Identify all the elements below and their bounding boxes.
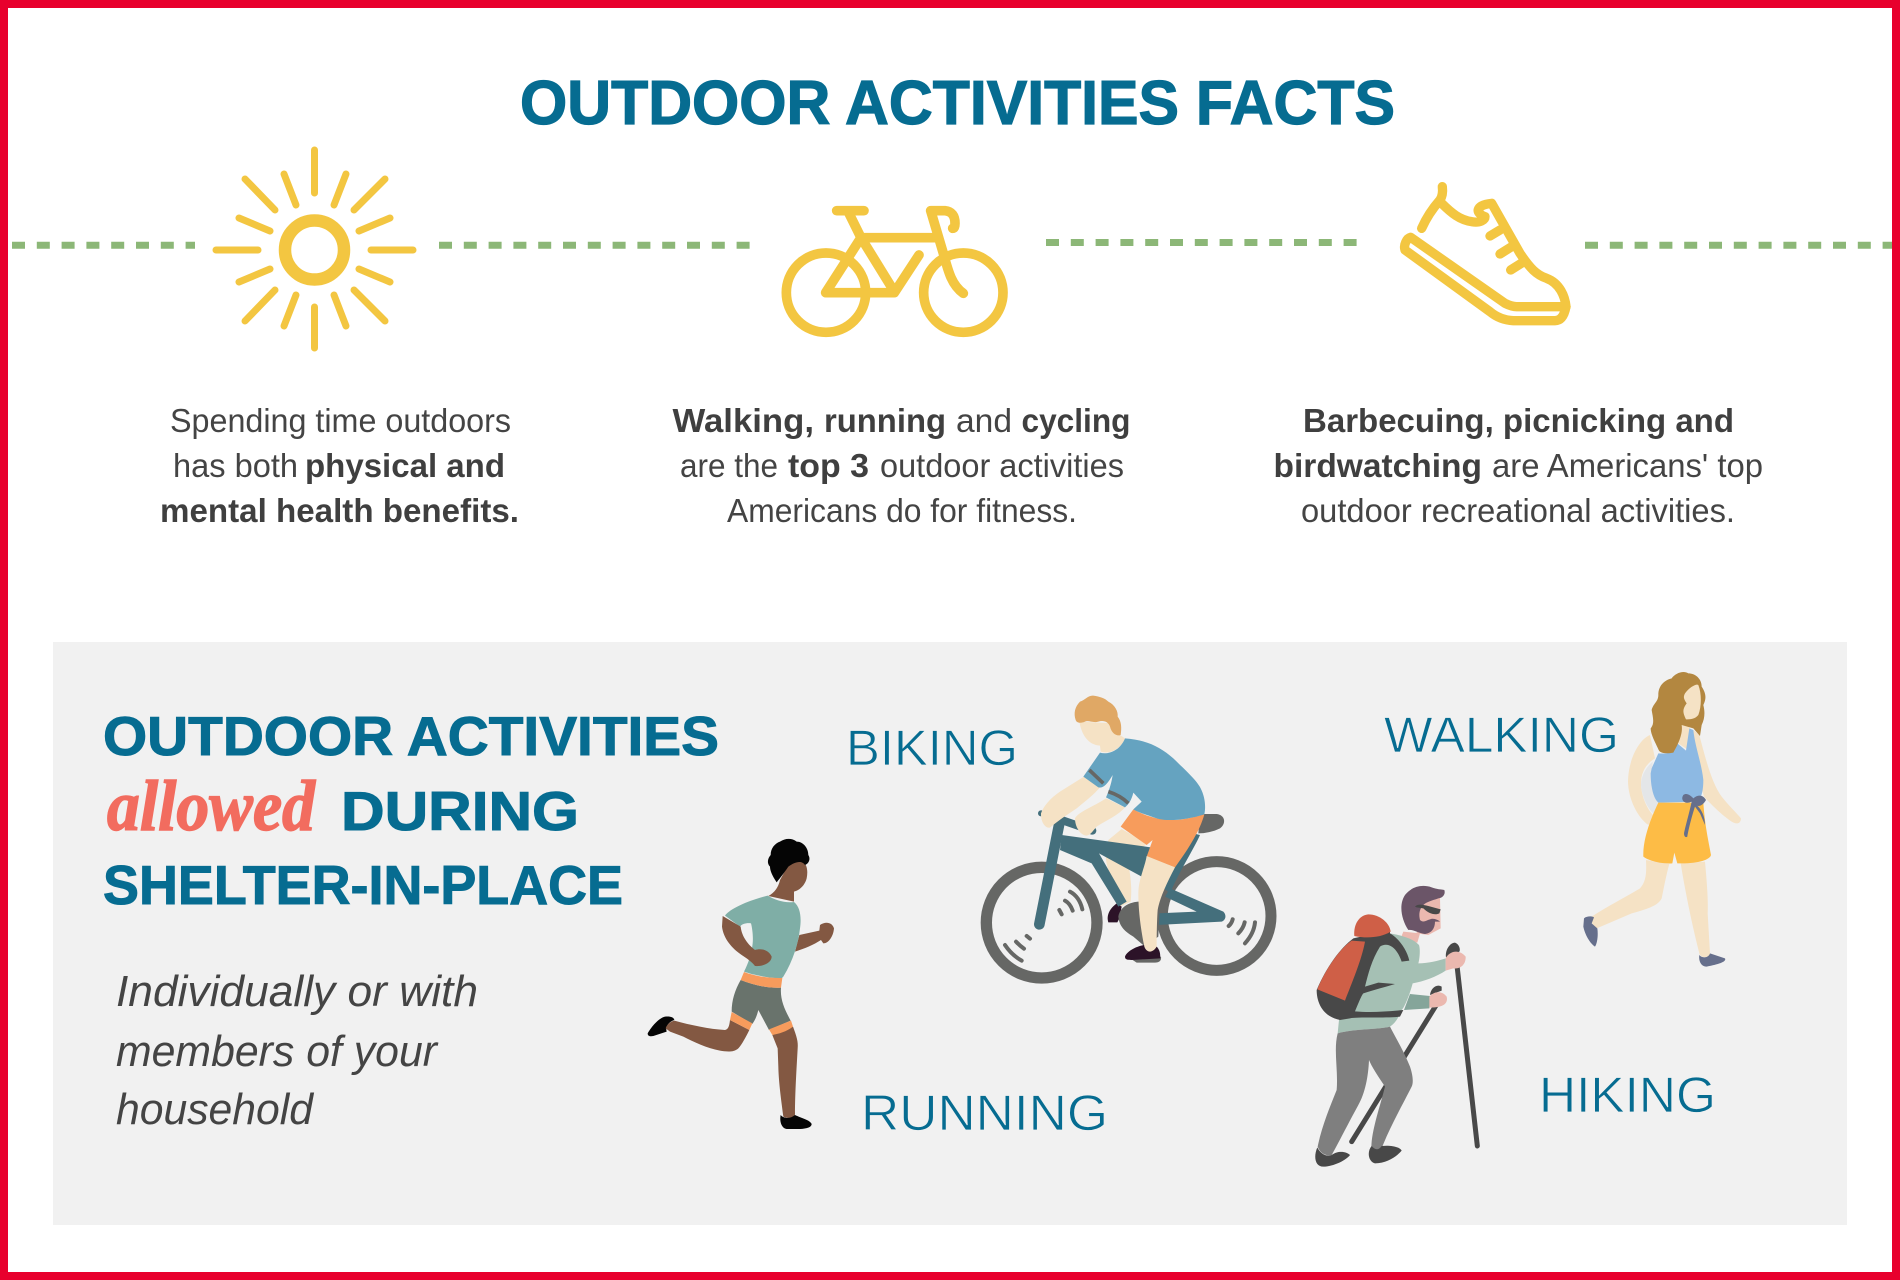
icon: shoe <box>1405 187 1566 321</box>
text block: top fitness activities: running <box>824 402 946 439</box>
text block: health benefits: mental health benefits. <box>160 492 519 529</box>
illustration: hiker <box>1315 886 1477 1167</box>
text block: top fitness activities: Americans do for fitness. <box>727 492 1077 529</box>
panel heading: OUTDOOR ACTIVITIES <box>103 705 719 767</box>
italic note: members of your <box>116 1027 439 1076</box>
panel heading: DURING <box>341 780 579 842</box>
icon: sun <box>216 150 413 348</box>
label: biking: BIKING <box>846 720 1018 776</box>
panel heading <box>103 705 719 916</box>
panel: activities allowed <box>53 642 1847 1225</box>
text block: top fitness activities <box>672 402 1130 529</box>
text block: top fitness activities: are the <box>680 447 778 484</box>
panel heading: SHELTER-IN-PLACE <box>103 854 623 916</box>
text block: top recreational activities: birdwatching <box>1274 447 1482 484</box>
text block: top fitness activities: cycling <box>1022 402 1130 439</box>
text block: top fitness activities: Walking, <box>672 402 814 439</box>
text block: top recreational activities <box>1274 402 1763 529</box>
illustration: runner <box>648 839 834 1129</box>
text block: top fitness activities: top 3 <box>788 447 869 484</box>
title: OUTDOOR ACTIVITIES FACTS <box>520 69 1395 138</box>
illustration: walker <box>1583 672 1741 967</box>
text block: health benefits: has both <box>173 447 298 484</box>
text block: top fitness activities: outdoor activities <box>880 447 1124 484</box>
text block: health benefits <box>160 402 519 529</box>
text block: top recreational activities: are Americans' top <box>1492 447 1763 484</box>
illustration: cyclist <box>986 696 1271 978</box>
italic note: household <box>116 1085 314 1134</box>
label: hiking: HIKING <box>1539 1067 1716 1123</box>
italic note <box>116 967 478 1134</box>
text block: health benefits: Spending time outdoors <box>170 402 511 439</box>
text block: top fitness activities: and <box>956 402 1012 439</box>
italic note: Individually or with <box>116 967 478 1016</box>
text block: health benefits: physical and <box>305 447 505 484</box>
icon: bicycle <box>786 211 1003 332</box>
text block: top recreational activities: Barbecuing, picnicking and <box>1303 402 1734 439</box>
label: walking: WALKING <box>1384 707 1619 763</box>
label: running: RUNNING <box>861 1085 1108 1141</box>
text block: top recreational activities: outdoor recreational activities. <box>1301 492 1735 529</box>
panel heading: allowed <box>107 766 316 846</box>
